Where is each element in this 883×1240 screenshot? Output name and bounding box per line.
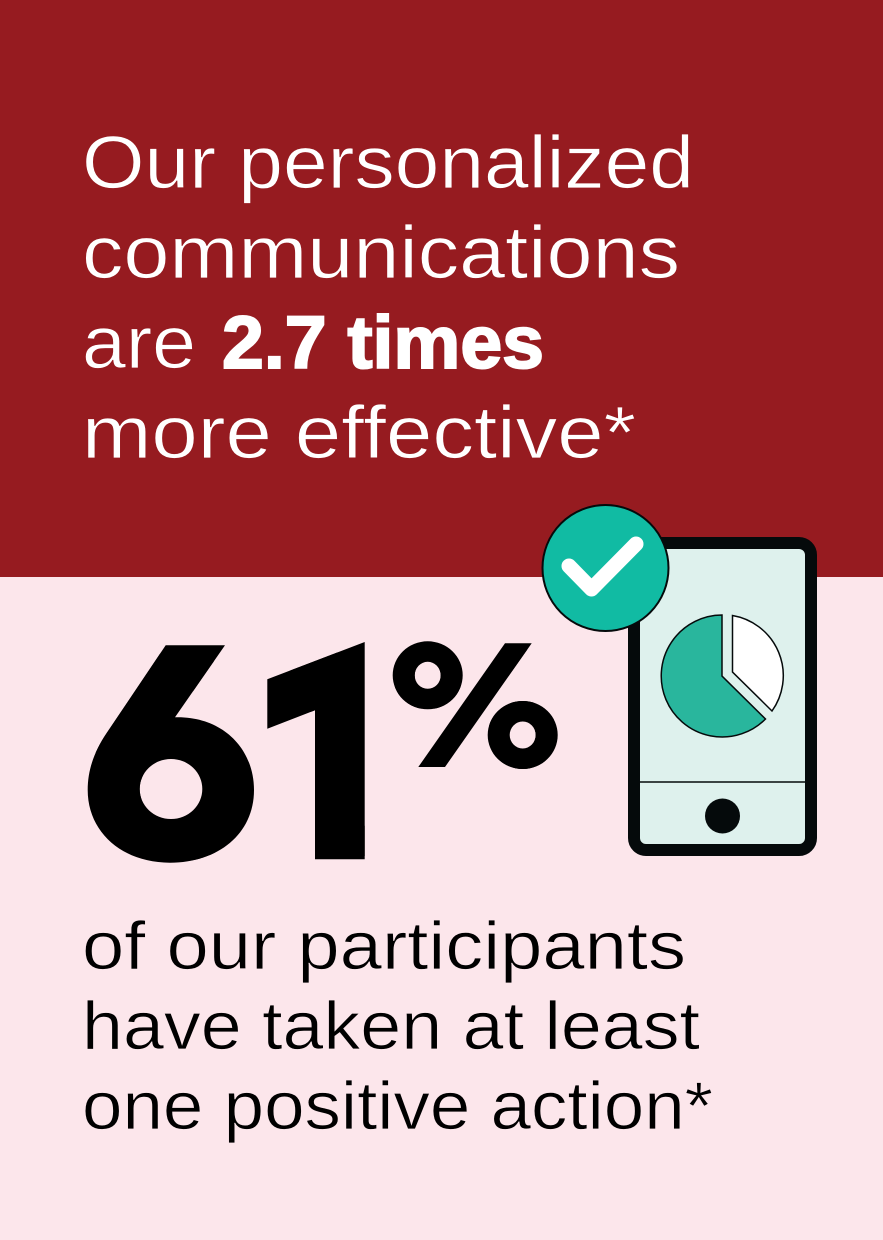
text block: participants statement: of our participants	[82, 908, 686, 984]
text block: participants statement: one positive action*	[82, 1068, 713, 1144]
panel: upper red banner	[0, 0, 883, 577]
phone home button	[705, 798, 740, 834]
big number: 61 percent: 1	[256, 588, 386, 919]
pie chart	[661, 615, 783, 737]
text block: participants statement	[82, 908, 713, 1144]
pie slice: white minority	[732, 616, 783, 711]
heading: personalized communications statement: are	[82, 301, 196, 384]
check mark	[569, 544, 636, 589]
big number: 61 percent	[88, 641, 558, 863]
big number: 61 percent: 6	[84, 591, 258, 922]
big number: 61 percent: %	[390, 613, 560, 805]
icon: check mark badge	[542, 505, 668, 631]
icon: smartphone with pie chart	[634, 543, 811, 850]
heading: personalized communications statement: Our personalized	[82, 121, 694, 204]
phone home bar divider	[640, 781, 805, 783]
heading: personalized communications statement: 2.7 times	[222, 301, 544, 384]
phone body	[634, 543, 811, 850]
badge circle	[542, 505, 668, 631]
pie slice: teal majority	[661, 615, 766, 737]
heading: personalized communications statement: communications	[82, 211, 680, 294]
text block: participants statement: have taken at least	[82, 988, 700, 1064]
heading: personalized communications statement	[82, 121, 694, 474]
heading: personalized communications statement: more effective*	[82, 391, 636, 474]
